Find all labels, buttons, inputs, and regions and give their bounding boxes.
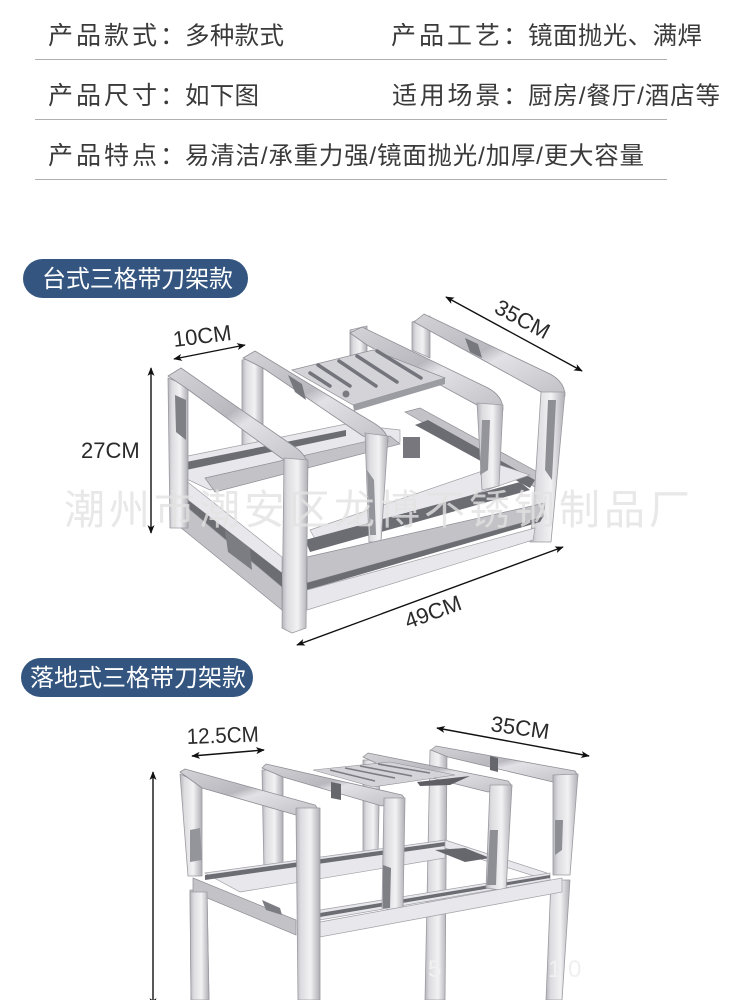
spec row 3: 易清洁/承重力强/镜面抛光/加厚/更大容量 xyxy=(185,142,644,170)
rack photo: floor-standing model xyxy=(180,746,578,1000)
dimensions: tabletop model: 49CM xyxy=(401,590,465,634)
rack photo: tabletop model xyxy=(168,314,565,633)
watermark digits: 5 xyxy=(428,956,441,983)
front frame xyxy=(180,769,320,1000)
dimensions: floor-standing model xyxy=(153,711,589,1000)
front frame xyxy=(168,368,308,633)
spec row 1 left xyxy=(48,22,284,50)
slotted plate xyxy=(292,350,445,411)
spec row 3: 产品特点： xyxy=(48,142,185,170)
slotted plate xyxy=(313,762,470,787)
dimensions: tabletop model: 10CM xyxy=(172,320,233,352)
spec row 2 left: 产品尺寸： xyxy=(48,82,185,110)
watermark digits: 1 0 xyxy=(548,956,581,983)
dimensions: tabletop model: 35CM xyxy=(491,294,554,344)
spec row 2 left: 如下图 xyxy=(185,82,259,110)
spec row 1 right: 镜面抛光、满焊 xyxy=(528,22,702,50)
heading pill: floor-standing model xyxy=(21,658,253,697)
shelf rails, front xyxy=(193,878,562,937)
spec row 1 left: 产品款式： xyxy=(48,22,185,50)
rear posts and feet xyxy=(242,316,430,458)
heading pill: tabletop model: 台式三格带刀架款 xyxy=(42,266,233,293)
heading pill: floor-standing model: 落地式三格带刀架款 xyxy=(30,665,246,692)
rear posts and legs xyxy=(190,750,570,1000)
spec row 1 right xyxy=(391,22,702,50)
dimensions: tabletop model xyxy=(81,294,582,645)
shelf rails, rear xyxy=(205,840,550,920)
third frame xyxy=(350,327,503,490)
heading pill: tabletop model xyxy=(23,259,248,298)
third frame xyxy=(363,753,512,891)
back frame xyxy=(414,314,565,542)
base rails, front xyxy=(175,472,545,610)
dimensions: floor-standing model: 12.5CM xyxy=(186,721,259,749)
spec row 1 left: 多种款式 xyxy=(185,22,284,50)
second frame xyxy=(262,764,405,910)
watermark digits xyxy=(428,956,581,983)
spec row 2 left xyxy=(48,82,259,110)
back frame xyxy=(431,746,578,875)
spec row 2 right: 适用场景： xyxy=(392,82,528,110)
spec row 2 right: 厨房/餐厅/酒店等 xyxy=(528,82,720,110)
spec row 2 right xyxy=(392,82,720,110)
spec row 1 right: 产品工艺： xyxy=(391,22,528,50)
watermark: 潮州市潮安区龙博不锈钢制品厂 xyxy=(64,487,690,533)
base rails, rear xyxy=(178,408,545,552)
dimensions: tabletop model: 27CM xyxy=(81,438,140,463)
second frame xyxy=(243,351,388,542)
dimensions: floor-standing model: 35CM xyxy=(489,711,551,744)
